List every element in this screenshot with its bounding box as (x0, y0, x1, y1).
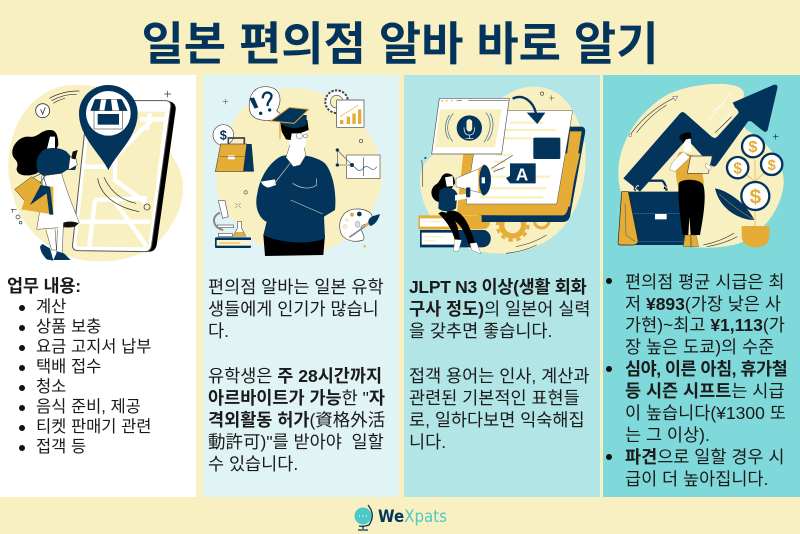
text: language level explanation: 로, 일하다보면 익숙해집 (409, 410, 585, 430)
illustration: woman with shopping bags and map phone (8, 85, 184, 262)
icon: microscope on book (214, 99, 251, 248)
text: language level explanation: 관련된 기본적인 표현들 (409, 388, 580, 408)
icon: woman with megaphone (431, 165, 491, 254)
text: wage bullet points: 가현)~최고 ¥1,113(가 (625, 315, 785, 335)
bullet list items: 상품 보충 (36, 318, 101, 336)
illustration: man with briefcase, rising arrow, money plant (618, 84, 784, 248)
icon: store location pin (79, 85, 138, 170)
illustration: thinking graduate student (212, 86, 382, 256)
icon: standing man (670, 133, 737, 247)
icon: rising arrow (623, 85, 777, 192)
icon: money plant: $ (750, 185, 762, 208)
icon: clock (36, 91, 79, 118)
text: work permit explanation: 수 있습니다. (208, 454, 298, 474)
logo: WeXpats: WeXpats (378, 507, 447, 526)
icon: money plant: $ (749, 139, 758, 156)
text: wage bullet points: 이 높습니다(¥1300 또 (625, 403, 786, 423)
logo: WeXpats (354, 504, 447, 531)
bullet list items: 티켓 판매기 관련 (36, 418, 151, 436)
icon: stacked books (418, 157, 567, 253)
text: work permit explanation: 아르바이트가 가능한 "자 (208, 388, 385, 408)
icon: money plant: $ (733, 160, 742, 177)
icon: graph board (336, 139, 380, 178)
panel: Japanese language level (404, 75, 600, 497)
text: language level explanation: 구사 정도)의 일본어 실력 (409, 299, 590, 319)
icon: curved arrow (513, 92, 554, 124)
icon: laptop: A (516, 165, 529, 185)
text: work permit explanation: 유학생은 주 28시간까지 (208, 366, 382, 386)
text: wage bullet points: 파견으로 일할 경우 시 (625, 447, 784, 467)
text: language level explanation: 접객 용어는 인사, 계산과 (409, 366, 589, 386)
panel: hourly wage (603, 75, 800, 497)
text: language level explanation: JLPT N3 이상(생활 회화 (409, 277, 586, 297)
bullet list items (19, 298, 151, 456)
text: work permit explanation: 다. (208, 321, 229, 341)
illustration: woman with megaphone, books and document (418, 86, 586, 254)
icon: money plant (715, 135, 782, 247)
text: language level explanation: 니다. (409, 432, 446, 452)
title: 일본 편의점 알바 바로 알기 (141, 8, 659, 74)
icon: briefcase with dollar: $ (220, 128, 227, 142)
text: job duties list (7, 276, 151, 456)
text: language level explanation (409, 277, 590, 452)
icon: briefcase with dollar (213, 125, 254, 172)
icon: money plant: $ (768, 158, 776, 174)
text: wage bullet points: 등 시즌 시프트는 시급 (625, 381, 784, 401)
icon: student figure (256, 107, 335, 256)
icon: gear and chart (325, 90, 364, 127)
icon: woman with bags (12, 130, 79, 261)
heading: job duties: 업무 내용: (7, 276, 81, 296)
text: wage bullet points: 편의점 평균 시급은 최 (625, 272, 784, 292)
text: work permit explanation: 動許可)"를 받아야 일할 (208, 432, 384, 452)
text: work permit explanation: 생들에게 인기가 많습니 (208, 299, 379, 319)
text: wage bullet points: 는 그 이상). (625, 425, 710, 445)
text: wage bullet points: 급이 더 높아집니다. (625, 469, 768, 489)
bullet list items: 청소 (36, 378, 66, 396)
panel: student work permit (203, 75, 399, 497)
text: wage bullet points: 장 높은 도쿄)의 수준 (625, 337, 774, 357)
bullet list items: 접객 등 (36, 438, 86, 456)
icon: gears (497, 210, 549, 240)
icon: browser window with microphone (432, 98, 509, 154)
text: work permit explanation (208, 277, 385, 474)
text: wage bullet points: 저 ¥893(가장 낮은 사 (625, 294, 781, 314)
icon: laptop (457, 111, 585, 222)
bullet list items: 택배 접수 (36, 358, 101, 376)
text: work permit explanation: 편의점 알바는 일본 유학 (208, 277, 384, 297)
text: work permit explanation: 격외활동 허가(資格外活 (208, 410, 385, 430)
icon: paint palette (340, 209, 380, 248)
panel: job duties (0, 75, 196, 497)
text: wage bullet points (606, 272, 787, 489)
bullet list items: 요금 고지서 납부 (36, 338, 151, 356)
icon: briefcase (618, 181, 687, 245)
text: language level explanation: 을 갖추면 좋습니다. (409, 321, 552, 341)
text: wage bullet points: 심야, 이른 아침, 휴가철 (625, 359, 787, 379)
icon: question bubble (249, 87, 282, 120)
bullet list items: 계산 (36, 298, 66, 316)
bullet list items: 음식 준비, 제공 (36, 398, 141, 416)
